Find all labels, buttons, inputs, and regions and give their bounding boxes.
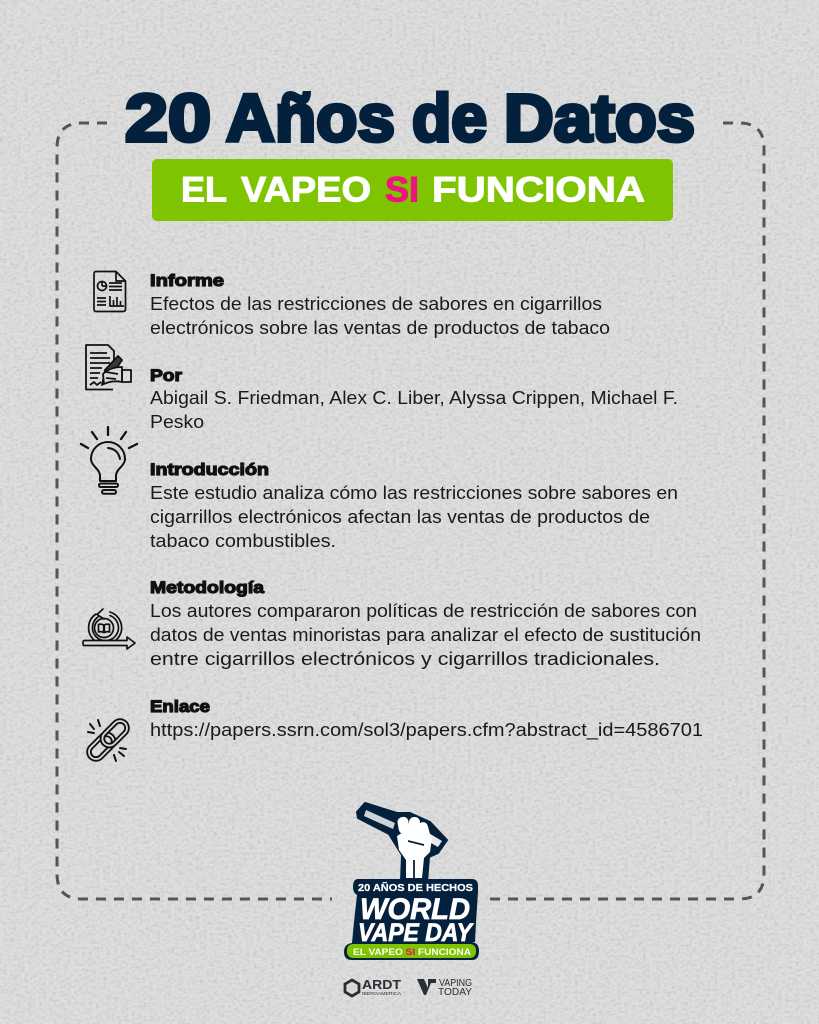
logo wordmark: WORLD — [360, 893, 470, 926]
logo: ardt iberoamerica: IBEROAMERICA — [362, 991, 402, 997]
title: 20 — [125, 81, 211, 156]
heading: informe: Informe — [150, 271, 224, 290]
icon: chain link — [86, 718, 130, 762]
logo: vaping today — [417, 978, 472, 998]
text block: introduccion — [150, 482, 678, 551]
text block: informe: electrónicos sobre las ventas de productos de tabaco — [150, 317, 610, 338]
logo plate — [344, 879, 479, 960]
text block: informe — [150, 293, 610, 338]
heading: introduccion: Introducción — [150, 460, 269, 479]
subtitle banner: SI — [385, 170, 419, 210]
heading: enlace: Enlace — [150, 697, 210, 716]
logo: ardt iberoamerica — [345, 978, 402, 997]
panel: introduccion — [150, 460, 678, 551]
title: Años — [226, 81, 395, 156]
panel: enlace — [150, 697, 703, 741]
logo: vaping today: VAPING — [439, 978, 472, 989]
logo wordmark: VAPE DAY — [358, 919, 474, 947]
heading: por: Por — [150, 366, 182, 385]
text block: por: Pesko — [150, 411, 204, 432]
panel: metodologia — [150, 578, 701, 669]
subtitle banner — [152, 159, 673, 221]
panel: por — [150, 366, 678, 432]
text block: metodologia: Los autores compararon políticas de restricción de sabores con — [150, 600, 697, 621]
icon: light bulb — [81, 427, 137, 494]
dashed frame — [57, 123, 764, 899]
icon: raised fist with vape — [357, 803, 447, 882]
text block: metodologia: datos de ventas minoristas para analizar el efecto de sustitución — [150, 624, 701, 645]
title: Datos — [504, 81, 695, 156]
icon: book cycle arrow — [83, 609, 135, 649]
text block: introduccion: Este estudio analiza cómo las restricciones sobre sabores en — [150, 482, 678, 503]
text block: metodologia: entre cigarrillos electrónicos y cigarrillos tradicionales. — [150, 648, 660, 669]
text block: metodologia — [150, 600, 701, 669]
title — [125, 81, 695, 156]
text block: introduccion: tabaco combustibles. — [150, 530, 336, 551]
subtitle banner: EL — [181, 170, 227, 210]
logo: ardt iberoamerica: ARDT — [362, 978, 401, 992]
title: de — [412, 81, 487, 156]
subtitle banner: VAPEO — [241, 170, 371, 210]
icon: report document — [94, 272, 126, 312]
text block: enlace: https://papers.ssrn.com/sol3/papers.cfm?abstract_id=4586701 — [150, 719, 703, 741]
subtitle banner: FUNCIONA — [432, 170, 645, 210]
heading: metodologia: Metodología — [150, 578, 265, 597]
text block: por — [150, 387, 678, 432]
logo wordmark — [358, 893, 474, 947]
logo green pill: EL VAPEO SI FUNCIONA — [353, 947, 471, 958]
icon: signed document — [86, 345, 131, 390]
text block: por: Abigail S. Friedman, Alex C. Liber, Alyssa Crippen, Michael F. — [150, 387, 678, 408]
logo tagline: 20 AÑOS DE HECHOS — [358, 881, 473, 894]
logo: world vape day — [344, 803, 479, 960]
text block: introduccion: cigarrillos electrónicos afectan las ventas de productos de — [150, 506, 650, 527]
logo: vaping today: TODAY — [438, 987, 472, 998]
text block: informe: Efectos de las restricciones de sabores en cigarrillos — [150, 293, 602, 314]
panel: informe — [150, 271, 610, 338]
